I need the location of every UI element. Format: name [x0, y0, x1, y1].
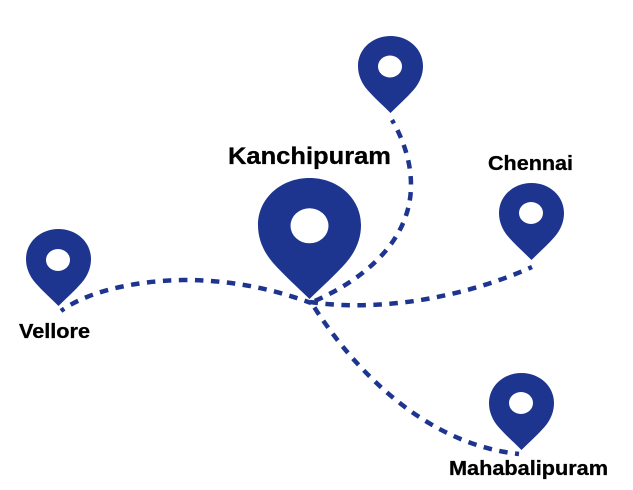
route: Kanchipuram to northern pin [310, 120, 411, 303]
route: Kanchipuram to Mahabalipuram [311, 302, 519, 454]
label: Kanchipuram: Kanchipuram [228, 143, 391, 170]
route: Kanchipuram to Chennai [310, 267, 532, 305]
label: Vellore: Vellore [19, 321, 90, 343]
pin: northern location [358, 36, 423, 113]
pin: Kanchipuram [258, 178, 361, 299]
pin: Vellore [26, 229, 91, 306]
label: Chennai: Chennai [488, 153, 573, 175]
pin: Chennai [499, 183, 564, 260]
pin: Mahabalipuram [489, 373, 554, 450]
label: Mahabalipuram: Mahabalipuram [449, 458, 608, 480]
route: Kanchipuram to Vellore [61, 280, 311, 311]
